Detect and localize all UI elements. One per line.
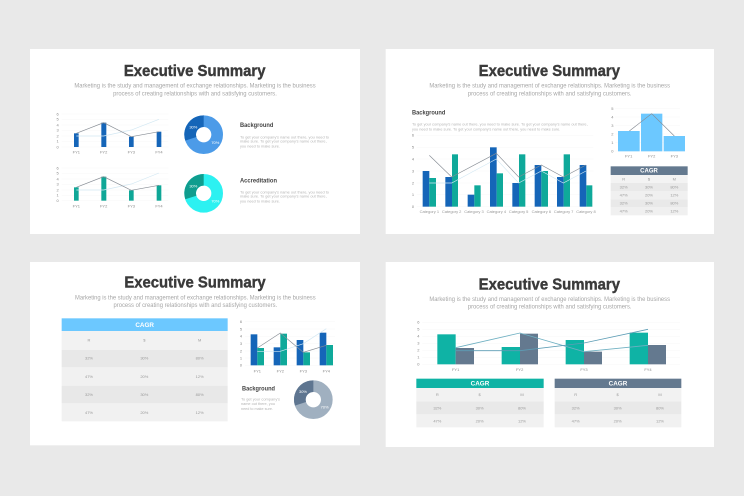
bar chart: teal: 4: [57, 176, 60, 181]
bar chart: blue and teal: 2: [240, 348, 243, 353]
table: CAGR slate: M: [658, 392, 662, 397]
table: CAGR slate: $: [648, 176, 651, 181]
donut chart: teal: [187, 176, 221, 210]
bar chart: blue: 6: [57, 111, 60, 116]
bar chart: blue and teal: 5: [240, 326, 243, 331]
text block: background: Background: [412, 110, 445, 117]
table: CAGR teal: 12%: [518, 418, 526, 423]
table: CAGR light blue: 47%: [85, 374, 93, 379]
bar chart: FY1 to FY3: FY2: [648, 154, 656, 159]
bar chart: blue: 3: [57, 128, 60, 133]
subtitle: Marketing is the study and management of exchange relationships. Marketing is the business: [429, 83, 671, 90]
bar chart: blue: 0: [57, 144, 60, 149]
table: CAGR slate: 12%: [656, 418, 664, 423]
bar chart: teal and slate: 2: [417, 348, 420, 353]
subtitle: [429, 83, 671, 97]
table: CAGR teal: 80%: [518, 405, 526, 410]
text block: accreditation: Accreditation: [240, 177, 277, 184]
table: CAGR slate: $: [617, 392, 620, 397]
bar chart: blue: FY2: [100, 150, 108, 155]
bar chart: blue and teal: 1: [240, 355, 243, 360]
bar chart: blue and teal: 4: [240, 334, 243, 339]
bar chart: teal: FY2: [100, 203, 108, 208]
subtitle: process of creating relationships with and satisfying customers.: [468, 304, 632, 311]
table: CAGR light blue: $: [143, 338, 146, 343]
table: CAGR light blue: 30%: [140, 392, 149, 397]
title: Executive Summary: [479, 276, 620, 293]
bar chart: teal and slate: 5: [417, 327, 420, 332]
bar chart: FY1 to FY3: 2: [611, 131, 614, 136]
bar chart: FY1 to FY3: 3: [611, 123, 614, 128]
bar chart: categories: 6: [412, 133, 415, 138]
subtitle: Marketing is the study and management of exchange relationships. Marketing is the business: [74, 83, 316, 90]
bar chart: teal: FY4: [155, 203, 163, 208]
table: CAGR teal: 47%: [433, 418, 442, 423]
subtitle: Marketing is the study and management of exchange relationships. Marketing is the business: [75, 294, 316, 301]
subtitle: process of creating relationships with and satisfying customers.: [113, 90, 277, 97]
bar chart: categories: Category 1: [420, 209, 440, 214]
bar chart: teal: 1: [57, 193, 60, 198]
title: Executive Summary: [124, 275, 266, 292]
bar chart: blue and teal: FY2: [277, 368, 285, 373]
bar chart: blue: 1: [57, 139, 60, 144]
donut chart: teal: 30%: [189, 183, 198, 188]
donut chart: teal: 70%: [211, 199, 220, 204]
bar chart: categories: [412, 133, 597, 214]
bar chart: teal and slate: 4: [417, 334, 420, 339]
bar chart: teal: 2: [57, 187, 60, 192]
title: Executive Summary: [479, 63, 620, 80]
text block: background: you need to make sure. To get your company's name out there, you need to make sure.: [412, 128, 560, 132]
table: CAGR light blue: 12%: [196, 410, 204, 415]
bar chart: blue and teal: FY3: [300, 368, 308, 373]
bar chart: teal and slate: 3: [417, 341, 420, 346]
title: Executive Summary: [124, 63, 266, 80]
table: CAGR slate: 20%: [645, 193, 653, 198]
bar chart: teal and slate: 0: [417, 362, 420, 367]
table: CAGR slate: CAGR: [609, 381, 628, 388]
text block: background: To get your company's name out there, you need to: [240, 135, 329, 139]
text block: background: make sure. To get your company's name out there,: [240, 140, 327, 144]
bar chart: categories: Category 7: [554, 209, 574, 214]
bar chart: teal: 6: [57, 165, 60, 170]
panel: slide 4, wide chart with two CAGR tables: [386, 262, 714, 447]
table: CAGR light blue: 20%: [140, 410, 149, 415]
table: CAGR light blue: 80%: [196, 356, 204, 361]
table: CAGR slate: 12%: [670, 193, 679, 198]
bar chart: blue and teal: FY1: [254, 368, 262, 373]
text block: background: To get your company's name out there, you need to make sure. To get your company's name out there,: [412, 123, 588, 127]
table: CAGR slate: R: [622, 176, 625, 181]
table: CAGR slate: 30%: [645, 185, 653, 190]
table: CAGR slate: 32%: [620, 185, 628, 190]
table: CAGR light blue: 80%: [196, 392, 204, 397]
text block: background: [240, 122, 329, 148]
bar chart: teal and slate: [417, 320, 680, 372]
bar chart: blue and teal: 0: [240, 363, 243, 368]
table: CAGR light blue: 20%: [140, 374, 149, 379]
bar chart: blue: FY1: [73, 150, 81, 155]
bar chart: teal: 5: [57, 171, 60, 176]
bar chart: blue and teal: [240, 319, 335, 373]
bar chart: blue and teal: FY4: [323, 368, 331, 373]
bar chart: FY1 to FY3: FY1: [625, 154, 633, 159]
text block: accreditation: To get your company's name out there, you need to: [240, 190, 329, 194]
table: CAGR light blue: [62, 318, 228, 421]
bar chart: teal: [57, 165, 168, 208]
text block: background: [241, 386, 280, 411]
table: CAGR light blue: 12%: [196, 374, 204, 379]
bar chart: blue: 2: [57, 133, 60, 138]
bar chart: categories: 1: [412, 192, 415, 197]
bar chart: categories: 2: [412, 180, 415, 185]
table: CAGR teal: 20%: [476, 418, 484, 423]
bar chart: teal and slate: FY1: [452, 367, 460, 372]
bar chart: FY1 to FY3: 5: [611, 106, 614, 111]
bar chart: blue and teal: 3: [240, 341, 243, 346]
bar chart: blue: FY3: [128, 150, 136, 155]
table: CAGR light blue: R: [88, 338, 91, 343]
table: CAGR slate: 20%: [614, 418, 622, 423]
donut chart: blue: 30%: [189, 125, 198, 130]
bar chart: categories: 3: [412, 168, 415, 173]
bar chart: teal: FY3: [128, 203, 136, 208]
text block: background: [412, 110, 588, 132]
bar chart: categories: Category 8: [576, 209, 597, 214]
text block: background: need to make sure.: [241, 407, 273, 411]
text block: accreditation: [240, 177, 329, 204]
table: CAGR slate: 12%: [670, 209, 679, 214]
subtitle: process of creating relationships with and satisfying customers.: [468, 90, 632, 97]
bar chart: categories: Category 3: [464, 209, 485, 214]
bar chart: blue: [57, 111, 168, 155]
text block: background: you need to make sure.: [240, 144, 280, 148]
table: CAGR slate: 47%: [572, 418, 580, 423]
table: CAGR slate: 32%: [620, 201, 628, 206]
table: CAGR slate: 30%: [614, 405, 622, 410]
table: CAGR teal: $: [479, 392, 482, 397]
table: CAGR slate: 80%: [670, 185, 679, 190]
table: CAGR slate: R: [574, 392, 577, 397]
bar chart: blue: 4: [57, 122, 60, 127]
bar chart: categories: Category 4: [487, 209, 507, 214]
text block: background: To get your company's: [241, 397, 280, 401]
donut chart: slate: [296, 383, 330, 417]
bar chart: FY1 to FY3: 0: [611, 148, 614, 153]
table: CAGR slate: [555, 379, 681, 427]
table: CAGR teal: M: [520, 392, 524, 397]
bar chart: FY1 to FY3: 1: [611, 140, 614, 145]
subtitle: [74, 83, 316, 97]
table: CAGR light blue: 32%: [85, 392, 93, 397]
text block: accreditation: make sure. To get your company's name out there,: [240, 195, 327, 199]
panel: slide 2, category chart with CAGR table: [386, 49, 714, 234]
bar chart: teal and slate: FY2: [516, 367, 524, 372]
bar chart: teal: 3: [57, 182, 60, 187]
text block: accreditation: you need to make sure.: [240, 200, 280, 204]
donut chart: slate: 70%: [321, 404, 329, 409]
table: CAGR teal: [416, 379, 544, 427]
table: CAGR slate: 47%: [620, 209, 628, 214]
bar chart: categories: Category 5: [509, 209, 529, 214]
table: CAGR teal: 32%: [433, 405, 442, 410]
table: CAGR slate: 47%: [620, 193, 628, 198]
bar chart: teal and slate: FY4: [644, 367, 652, 372]
bar chart: categories: Category 6: [532, 209, 552, 214]
table: CAGR teal: CAGR: [471, 381, 490, 388]
text block: background: Background: [240, 122, 273, 129]
bar chart: teal: 0: [57, 198, 60, 203]
text block: background: Background: [242, 386, 275, 393]
subtitle: process of creating relationships with and satisfying customers.: [113, 302, 277, 309]
table: CAGR slate: 30%: [645, 201, 653, 206]
bar chart: FY1 to FY3: [611, 106, 685, 159]
bar chart: categories: 0: [412, 204, 415, 209]
bar chart: categories: 4: [412, 156, 415, 161]
table: CAGR light blue: CAGR: [135, 322, 154, 329]
donut chart: slate: 30%: [299, 389, 307, 394]
table: CAGR slate: [611, 166, 688, 215]
bar chart: blue: 5: [57, 117, 60, 122]
table: CAGR slate: CAGR: [640, 169, 658, 175]
bar chart: blue and teal: 6: [240, 319, 243, 324]
donut chart: blue: 70%: [211, 140, 220, 145]
bar chart: teal and slate: 1: [417, 355, 420, 360]
panel: slide 3, large CAGR table with chart and donut: [30, 262, 360, 445]
table: CAGR slate: 80%: [670, 201, 679, 206]
subtitle: [429, 296, 671, 311]
table: CAGR light blue: M: [198, 338, 201, 343]
bar chart: FY1 to FY3: FY3: [671, 154, 679, 159]
table: CAGR light blue: 47%: [85, 410, 93, 415]
subtitle: Marketing is the study and management of exchange relationships. Marketing is the business: [429, 296, 671, 303]
table: CAGR light blue: 32%: [85, 356, 93, 361]
bar chart: FY1 to FY3: 4: [611, 114, 614, 119]
table: CAGR slate: M: [673, 176, 676, 181]
table: CAGR slate: 32%: [572, 405, 580, 410]
text block: background: name out there, you: [241, 402, 275, 406]
table: CAGR teal: 30%: [476, 405, 484, 410]
subtitle: [75, 294, 316, 309]
bar chart: teal and slate: 6: [417, 320, 420, 325]
bar chart: categories: 5: [412, 145, 415, 150]
table: CAGR teal: R: [436, 392, 439, 397]
bar chart: categories: Category 2: [442, 209, 462, 214]
table: CAGR slate: 80%: [656, 405, 664, 410]
bar chart: teal and slate: FY3: [580, 367, 588, 372]
donut chart: blue: [187, 118, 221, 152]
table: CAGR slate: 20%: [645, 209, 653, 214]
panel: slide 1, blue and teal bar charts with donuts: [30, 49, 360, 234]
table: CAGR light blue: 30%: [140, 356, 149, 361]
bar chart: teal: FY1: [73, 203, 81, 208]
bar chart: blue: FY4: [155, 150, 163, 155]
